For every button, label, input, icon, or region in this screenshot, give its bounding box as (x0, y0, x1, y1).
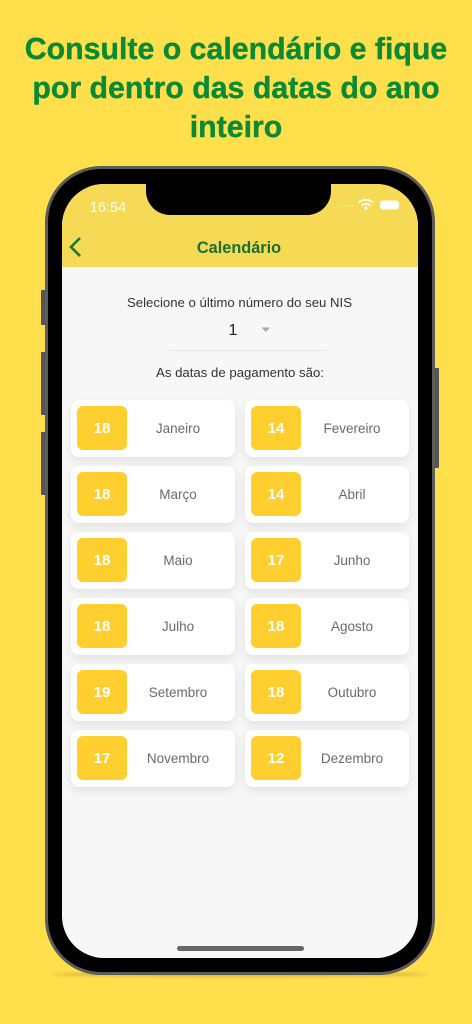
card: Março (71, 466, 235, 523)
card: Abril (245, 466, 409, 523)
card: Julho: Julho (162, 619, 194, 634)
header bar (62, 184, 418, 267)
card: Novembro: Novembro (147, 751, 209, 766)
dropdown arrow (262, 328, 270, 332)
card: Dezembro: 12 (268, 750, 284, 767)
card: Janeiro (71, 400, 235, 457)
dates label: As datas de pagamento são: (156, 365, 324, 380)
card: Março: Março (159, 487, 197, 502)
card: Fevereiro: Fevereiro (323, 421, 381, 436)
card: Abril: 14 (268, 486, 284, 503)
side buttons (41, 290, 45, 495)
NIS label: Selecione o último número do seu NIS (127, 295, 352, 310)
card: Fevereiro: 14 (268, 420, 284, 437)
card: Abril: Abril (338, 487, 366, 502)
home indicator (177, 946, 304, 951)
card: Junho: 17 (268, 552, 284, 569)
card: Agosto: Agosto (331, 619, 373, 634)
NIS selector (169, 318, 327, 351)
card: Novembro (71, 730, 235, 787)
cards grid (70, 406, 410, 792)
card: Outubro (245, 664, 409, 721)
card: Maio (71, 532, 235, 589)
card: Julho (71, 598, 235, 655)
back arrow (69, 237, 81, 257)
card: Setembro (71, 664, 235, 721)
card: Setembro: Setembro (149, 685, 207, 700)
card: Junho (245, 532, 409, 589)
card: Outubro: Outubro (328, 685, 376, 700)
notch (146, 180, 331, 215)
header title: Calendário (197, 239, 281, 257)
screen (62, 184, 418, 958)
status time: 16:54 (90, 200, 126, 216)
title: Consulte o calendário e fique (25, 33, 447, 66)
card: Junho: Junho (334, 553, 370, 568)
card: Outubro: 18 (268, 684, 284, 701)
card: Dezembro (245, 730, 409, 787)
card: Setembro: 19 (94, 684, 110, 701)
power button (434, 368, 439, 468)
title: por dentro das datas do ano (32, 72, 440, 105)
card: Dezembro: Dezembro (321, 751, 383, 766)
card: Janeiro: 18 (94, 420, 110, 437)
selected number: 1 (229, 322, 237, 339)
title: inteiro (190, 111, 282, 144)
card: Maio: Maio (163, 553, 193, 568)
phone (45, 166, 435, 975)
card: Maio: 18 (94, 552, 110, 569)
card: Março: 18 (94, 486, 110, 503)
card: Julho: 18 (94, 618, 110, 635)
card: Novembro: 17 (94, 750, 110, 767)
title (25, 33, 447, 144)
card: Agosto: 18 (268, 618, 284, 635)
card: Fevereiro (245, 400, 409, 457)
card: Janeiro: Janeiro (156, 421, 200, 436)
phone shadow (50, 973, 430, 976)
card: Agosto (245, 598, 409, 655)
status icons (339, 198, 399, 210)
